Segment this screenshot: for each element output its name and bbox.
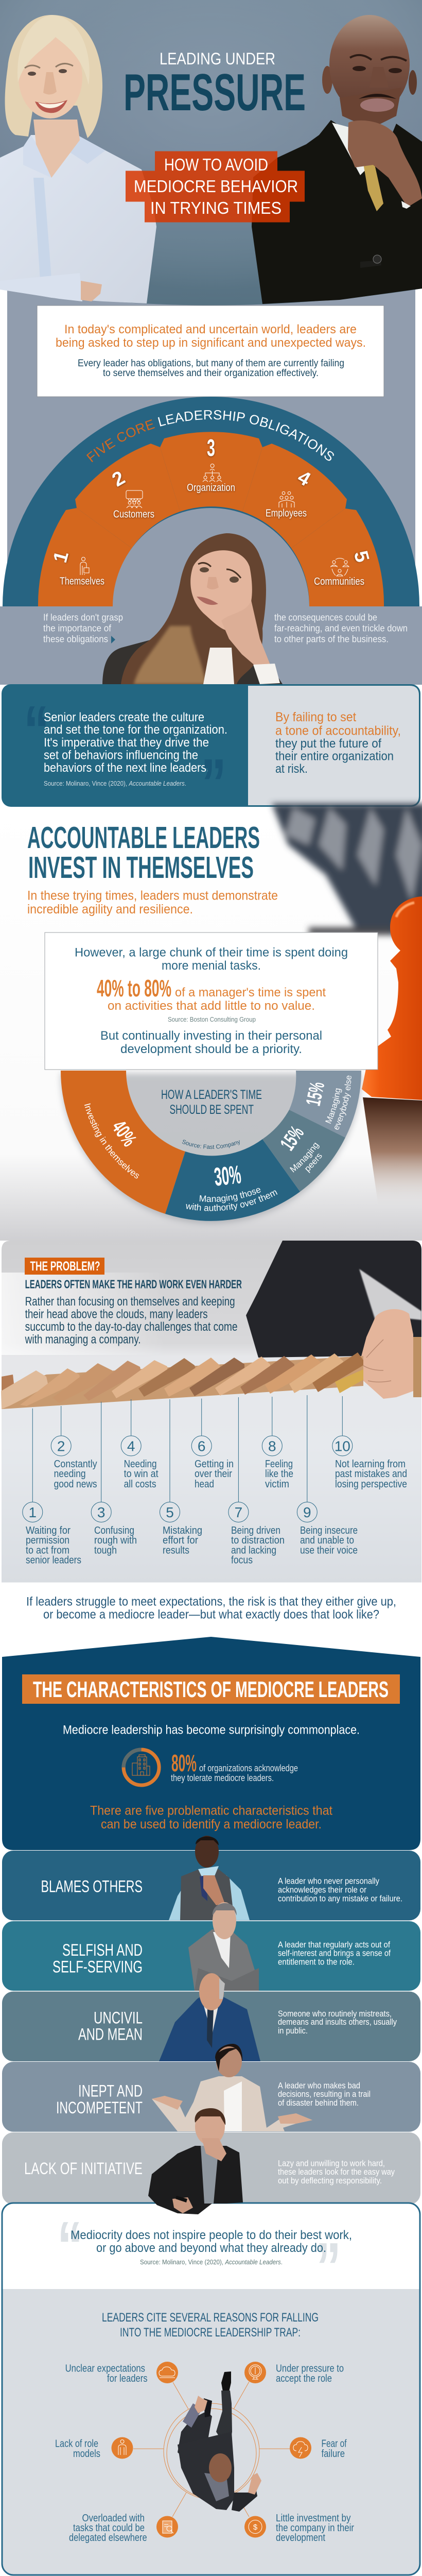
item 5: 5 <box>166 1504 174 1520</box>
reason: unclear expectations: for leaders <box>107 2373 148 2384</box>
segment 5: communities: 5 <box>349 549 373 565</box>
hero vignette <box>0 0 422 305</box>
item 10: Not learning from <box>335 1459 406 1470</box>
reason: little investment: development <box>276 2532 325 2544</box>
item 8: like the <box>265 1468 293 1480</box>
item 1: 1 <box>29 1504 37 1520</box>
item 2: 2 <box>57 1438 65 1454</box>
title <box>124 49 306 122</box>
item 2: needing <box>54 1468 86 1480</box>
panel: mediocrity quote and reasons <box>2 2203 420 2575</box>
panel: menial tasks callout: of a manager's time is spent <box>175 986 326 999</box>
right callout text: at risk. <box>275 762 308 776</box>
donut labels: Managing <box>290 1143 320 1173</box>
donut labels: Investing in themselves <box>84 1104 139 1179</box>
row: selfish and self-serving: self-interest and brings a sense of <box>278 1948 391 1958</box>
donut labels: peers <box>305 1154 322 1173</box>
segment 2: customers <box>75 444 180 548</box>
source: Source: Molinaro, Vince (2020), Accountable Leaders. <box>44 780 186 787</box>
photo: thoughtful man in suit <box>252 15 422 304</box>
item 2: good news <box>54 1479 97 1490</box>
right callout text <box>275 710 401 776</box>
paragraph <box>25 1295 238 1346</box>
row: selfish and self-serving: entitlement to the role. <box>278 1957 355 1967</box>
text: transition question: or become a mediocre leader—but what exactly does that look like? <box>43 1608 379 1622</box>
text: obligations consequence left <box>43 612 123 645</box>
text: transition question <box>26 1595 396 1622</box>
item 7: to distraction <box>231 1535 285 1546</box>
text: trying times <box>27 888 278 917</box>
item 9: 9 <box>303 1504 311 1520</box>
reason: under pressure: accept the role <box>276 2373 332 2384</box>
panel: menial tasks callout: Source: Boston Consulting Group <box>168 1016 256 1023</box>
item 6: 6 <box>198 1438 205 1454</box>
row: blames others: acknowledges their role or <box>278 1885 366 1895</box>
stat: 80 percent: they tolerate mediocre leaders. <box>171 1773 274 1783</box>
reason: lack of role models: Lack of role <box>55 2438 98 2450</box>
heading: accountable leaders: ACCOUNTABLE LEADERS <box>27 821 260 855</box>
text: obligations consequence left: the importance of <box>43 623 112 634</box>
icon: storm cloud <box>293 2442 308 2457</box>
row: inept and incompetent: INEPT AND <box>78 2082 143 2100</box>
panel: menial tasks callout: more menial tasks. <box>162 959 261 973</box>
icon: person question mark <box>118 2440 126 2455</box>
photo: man with lack of initiative <box>148 2108 243 2214</box>
row: blames others: BLAMES OTHERS <box>41 1877 143 1896</box>
item 6: head <box>195 1479 214 1490</box>
photo: shrugging woman <box>152 2044 312 2131</box>
paragraph: succumb to the day-to-day challenges that come <box>25 1320 238 1334</box>
stat: 80 percent <box>171 1750 298 1783</box>
photo: man blaming others <box>169 1836 250 1920</box>
donut centre: Source: Fast Company <box>182 1140 240 1149</box>
photo: standing domino <box>413 1337 421 1397</box>
photo: blurred chess pawns <box>272 804 422 935</box>
icon: building <box>132 1755 150 1775</box>
row: lack of initiative: Lazy and unwilling to work hard, <box>278 2159 385 2168</box>
reason: overloaded: tasks that could be <box>73 2522 145 2534</box>
chart: 80 percent ring <box>124 1750 159 1785</box>
photo: background gap <box>359 1269 421 1321</box>
text: obligations consequence right: far-reaching, and even trickle down <box>274 623 408 634</box>
row: inept and incompetent: decisions, resulting in a trail <box>278 2089 371 2099</box>
reason: fear of failure <box>290 2437 347 2460</box>
row: lack of initiative: out by deflecting responsibility. <box>278 2176 382 2185</box>
hero banner <box>0 0 422 305</box>
donut soft shadow <box>61 1073 361 1224</box>
text: commonplace: Mediocre leadership has become surprisingly commonplace. <box>63 1723 360 1737</box>
photo: man in grey suit <box>188 1902 259 1991</box>
segment 4: employees: Employees <box>266 508 307 519</box>
reason: fear of failure: failure <box>321 2448 345 2460</box>
quote text: behaviors of the next line leaders. <box>44 761 209 775</box>
text: obligations consequence right <box>274 612 408 645</box>
panel: menial tasks callout: However, a large chunk of their time is spent doing <box>75 946 348 960</box>
row: lack of initiative <box>2 2132 420 2205</box>
item 5 <box>160 1399 202 1556</box>
pawn reflection <box>363 1097 422 1206</box>
intro text box <box>37 306 384 397</box>
icon: dollar <box>249 2520 262 2534</box>
row: uncivil and mean: UNCIVIL <box>94 2009 143 2027</box>
icon: cloud <box>159 2367 175 2378</box>
text: trying times: In these trying times, leaders must demonstrate <box>27 888 278 903</box>
segment: 15% managing peers <box>262 1110 345 1192</box>
text: obligations consequence right: to other parts of the business. <box>274 634 389 645</box>
quote mark close: ” <box>315 2228 341 2306</box>
row: uncivil and mean: demeans and insults others, usually <box>278 2017 397 2027</box>
item 6 <box>191 1399 234 1490</box>
quote text: It's imperative that they drive the <box>44 736 209 750</box>
photo: angry older man <box>159 1973 260 2061</box>
row: lack of initiative: these leaders look for the easy way <box>278 2167 395 2177</box>
right callout text: By failing to set <box>275 710 356 724</box>
item 4: all costs <box>124 1479 156 1490</box>
arch inner <box>113 508 309 606</box>
paragraph: with managing a company. <box>25 1332 141 1346</box>
row: uncivil and mean: in public. <box>278 2026 308 2036</box>
right callout text: their entire organization <box>275 749 394 764</box>
stat: 80 percent: of organizations acknowledge <box>199 1763 298 1773</box>
item 8: 8 <box>268 1438 276 1454</box>
reason: little investment <box>244 2513 354 2544</box>
reason: unclear expectations: Unclear expectations <box>65 2363 145 2375</box>
heading: accountable leaders <box>27 821 260 885</box>
panel: menial tasks callout: 40% to 80% <box>97 975 171 1002</box>
row: uncivil and mean <box>2 1992 420 2061</box>
donut labels: with authority over them <box>186 1190 278 1211</box>
text: obligations consequence left: If leaders don't grasp <box>43 612 123 622</box>
reason: under pressure: Under pressure to <box>276 2363 344 2375</box>
item 7: and lacking <box>231 1545 276 1556</box>
item 1 <box>23 1409 81 1566</box>
item 1: to act from <box>26 1545 69 1556</box>
text: obligations consequence left: these obligations <box>43 634 108 645</box>
item 9: use their voice <box>300 1545 358 1556</box>
right callout text: a tone of accountability, <box>275 723 401 738</box>
donut centre: SHOULD BE SPENT <box>170 1103 254 1117</box>
item 10: past mistakes and <box>335 1468 407 1480</box>
donut centre: HOW A LEADER'S TIME <box>161 1088 262 1102</box>
segment: 30% managing those with authority <box>165 1139 300 1221</box>
item 1: senior leaders <box>26 1554 81 1566</box>
donut labels: 30% <box>213 1160 242 1192</box>
title: LEADING UNDER <box>160 49 275 68</box>
segment 3: organization <box>160 432 262 512</box>
segment 3: organization: Organization <box>187 482 235 494</box>
item 5: effort for <box>163 1535 198 1546</box>
item 7 <box>228 1397 285 1566</box>
subtitle boxes: HOW TO AVOID <box>164 155 268 174</box>
item 4: 4 <box>127 1438 135 1454</box>
segment 2: customers: Customers <box>113 509 154 520</box>
item 3: Confusing <box>94 1525 134 1536</box>
panel: intro backdrop <box>7 278 415 608</box>
reason: lack of role models: models <box>73 2448 100 2460</box>
row: selfish and self-serving: SELFISH AND <box>62 1941 143 1959</box>
heading: reasons: LEADERS CITE SEVERAL REASONS FOR FALLING <box>102 2311 319 2325</box>
panel: the problem <box>1 1241 421 1583</box>
stat: 80 percent: 80% <box>171 1750 197 1776</box>
segment 3: organization: 3 <box>207 434 215 461</box>
heading: reasons <box>102 2311 319 2340</box>
row: inept and incompetent <box>2 2062 420 2132</box>
item 1: permission <box>26 1535 69 1546</box>
item 3: 3 <box>97 1504 105 1520</box>
item 7: Being driven <box>231 1525 280 1536</box>
item 6: over their <box>195 1468 232 1480</box>
title: PRESSURE <box>124 64 306 122</box>
row: selfish and self-serving: SELF-SERVING <box>52 1958 143 1976</box>
item 6: Getting in <box>195 1459 234 1470</box>
left soft highlight <box>2 1273 166 1355</box>
item 7: 7 <box>235 1504 242 1520</box>
segment 4: employees: 4 <box>294 466 314 490</box>
donut labels: 40% <box>108 1116 140 1150</box>
tag: the problem: THE PROBLEM? <box>30 1259 100 1274</box>
quote mark open: “ <box>24 691 49 769</box>
tag: the problem <box>25 1258 104 1275</box>
quote text <box>71 2228 352 2255</box>
quote text: Mediocrity does not inspire people to do their best work, <box>71 2228 352 2242</box>
reason: overloaded: delegated elsewhere <box>69 2532 147 2544</box>
row: blames others: A leader who never personally <box>278 1876 379 1886</box>
reason: fear of failure: Fear of <box>321 2438 347 2450</box>
row: blames others <box>2 1851 420 1921</box>
segment 1: themselves: Themselves <box>60 576 104 587</box>
paragraph: Rather than focusing on themselves and keeping <box>25 1295 235 1309</box>
photo: orange chess pawn <box>362 896 422 1100</box>
row: inept and incompetent: A leader who makes bad <box>278 2080 360 2091</box>
panel: senior leaders quote <box>2 684 420 822</box>
icon: community circle <box>331 558 349 576</box>
item 8: Feeling <box>265 1459 293 1470</box>
reason: overloaded <box>69 2513 178 2544</box>
icon: document search <box>163 2521 173 2533</box>
donut labels: 15% <box>276 1122 308 1155</box>
row: selfish and self-serving <box>2 1921 420 1991</box>
item 5: Mistaking <box>163 1525 202 1536</box>
row: lack of initiative: LACK OF INITIATIVE <box>24 2159 143 2178</box>
segment 1: themselves <box>38 508 132 606</box>
panel: menial tasks callout <box>45 933 378 1070</box>
icon: customers <box>126 490 143 508</box>
panel: accountable leaders section background <box>0 804 422 1241</box>
hero background <box>0 0 422 305</box>
subtitle boxes: MEDIOCRE BEHAVIOR <box>134 177 298 196</box>
segment 2: customers: 2 <box>109 467 129 491</box>
row: blames others: contribution to any mistake or failure. <box>278 1893 402 1903</box>
text: obligations consequence right: the consequences could be <box>274 612 377 622</box>
intro text box: to serve themselves and their organization effectively. <box>103 368 319 379</box>
diagram: connector lines and rings <box>133 2382 290 2517</box>
photo: smiling woman <box>0 15 156 303</box>
reason: unclear expectations <box>65 2362 178 2384</box>
item 1: Waiting for <box>26 1525 71 1536</box>
quote text: set of behaviors influencing the <box>44 749 198 762</box>
item 4 <box>121 1399 159 1490</box>
panel: menial tasks callout: on activities that add little to no value. <box>108 999 315 1013</box>
photo: dark sleeve <box>246 1241 421 1358</box>
chart: five core leadership obligations arch <box>3 397 419 606</box>
icon: employees <box>279 492 294 507</box>
photo: falling businessman <box>178 2371 261 2512</box>
item 10 <box>332 1396 407 1490</box>
heading: reasons: INTO THE MEDIOCRE LEADERSHIP TRAP: <box>120 2326 301 2340</box>
item 4: to win at <box>124 1468 159 1480</box>
item 5: results <box>163 1545 189 1556</box>
item 10: 10 <box>335 1438 350 1454</box>
heading: accountable leaders: INVEST IN THEMSELVES <box>28 851 254 885</box>
item 3: rough with <box>94 1535 137 1546</box>
item 9 <box>297 1395 358 1556</box>
intro text box: being asked to step up in significant and unexpected ways. <box>56 336 366 350</box>
subtitle boxes: IN TRYING TIMES <box>150 198 282 217</box>
item 8: victim <box>265 1479 289 1490</box>
quote text: or go above and beyond what they already do. <box>96 2241 326 2255</box>
item 4: Needing <box>124 1459 157 1470</box>
quote text: and set the tone for the organization. <box>44 723 227 737</box>
chart: how a leader's time should be spent <box>58 1070 364 1226</box>
reason: little investment: Little investment by <box>276 2513 351 2524</box>
segment 5: communities: Communities <box>314 576 364 587</box>
item 7: focus <box>231 1554 253 1566</box>
reason: lack of role models <box>55 2437 133 2460</box>
text: five characteristics <box>90 1803 332 1832</box>
quote text <box>44 710 227 775</box>
donut labels: Managing those <box>200 1188 261 1204</box>
donut centre <box>161 1088 262 1149</box>
panel: characteristics of mediocre leaders <box>2 1637 420 1850</box>
heading: LEADERS OFTEN MAKE THE HARD WORK EVEN HARDER <box>25 1278 242 1291</box>
arch outer band <box>3 397 419 606</box>
icon: person with briefcase <box>80 557 89 575</box>
icon: small arrow <box>111 636 115 643</box>
panel: menial tasks callout: But continually investing in their personal <box>100 1029 322 1043</box>
reason: little investment: the company in their <box>276 2522 354 2534</box>
photo: woman looking up <box>102 533 283 684</box>
item 8 <box>262 1397 293 1490</box>
icon: org chart <box>203 464 222 482</box>
text: five characteristics: There are five problematic characteristics that <box>90 1803 332 1818</box>
segment 4: employees <box>242 444 347 548</box>
text: five characteristics: can be used to identify a mediocre leader. <box>101 1817 322 1832</box>
panel: menial tasks callout: development should be a priority. <box>120 1042 302 1056</box>
reason: overloaded: Overloaded with <box>82 2513 145 2524</box>
donut labels: 15% <box>302 1080 329 1108</box>
row: uncivil and mean: Someone who routinely mistreats, <box>278 2009 392 2019</box>
photo: falling wooden dominoes <box>1 1352 363 1409</box>
item 3 <box>91 1402 137 1556</box>
segment: 15% managing everybody else <box>289 1071 361 1138</box>
row: selfish and self-serving: A leader that regularly acts out of <box>278 1940 390 1950</box>
item 2: Constantly <box>54 1459 97 1470</box>
reason: under pressure <box>244 2362 344 2384</box>
item 2 <box>51 1406 97 1490</box>
intro text box: Every leader has obligations, but many of them are currently failing <box>78 358 344 369</box>
right callout text: they put the future of <box>275 737 381 751</box>
intro text box: In today's complicated and uncertain world, leaders are <box>64 323 357 336</box>
segment 1: themselves: 1 <box>49 549 73 565</box>
row: inept and incompetent: INCOMPETENT <box>56 2098 143 2117</box>
photo: hand <box>360 1309 413 1399</box>
donut labels: everybody else <box>335 1076 351 1130</box>
icon: pressure gauge <box>249 2365 261 2379</box>
donut labels <box>84 1076 351 1211</box>
item 3: tough <box>94 1545 117 1556</box>
subtitle boxes <box>126 151 305 223</box>
quote mark close: ” <box>201 744 226 822</box>
text: trying times: incredible agility and resilience. <box>27 902 193 917</box>
segment 5: communities <box>291 509 384 606</box>
quote mark open: “ <box>57 2207 83 2285</box>
icon: dollar: $ <box>253 2523 258 2532</box>
item 9: Being insecure <box>300 1525 358 1536</box>
row: inept and incompetent: of disaster behind them. <box>278 2098 359 2108</box>
text: transition question: If leaders struggle to meet expectations, the risk is that they either give up, <box>26 1595 396 1609</box>
item 10: losing perspective <box>335 1479 407 1490</box>
item 9: and unable to <box>300 1535 354 1546</box>
paragraph: their head above the clouds, many leaders <box>25 1307 208 1321</box>
donut labels: Managing <box>325 1088 342 1124</box>
section band under arch <box>0 606 422 685</box>
quote text: Senior leaders create the culture <box>44 710 204 724</box>
row: uncivil and mean: AND MEAN <box>78 2025 143 2044</box>
segment: 40% investing in themselves <box>61 1071 185 1214</box>
source: Source: Molinaro, Vince (2020), Accountable Leaders. <box>140 2259 283 2266</box>
arch heading: FIVE CORE LEADERSHIP OBLIGATIONS <box>86 410 334 463</box>
